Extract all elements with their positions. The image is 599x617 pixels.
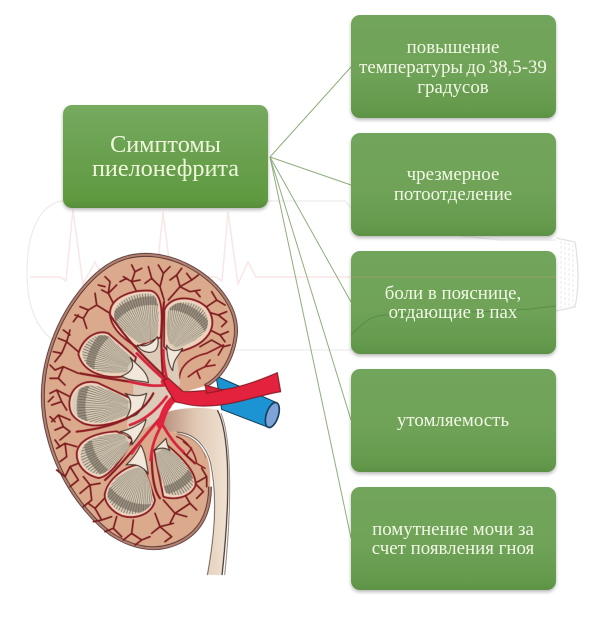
symptom box 2	[351, 133, 556, 236]
background: faint bottle outline	[27, 201, 578, 350]
symptom box 5: счет появления гноя	[372, 538, 535, 559]
symptom box 4	[351, 369, 556, 472]
symptom box 3: боли в пояснице,	[385, 283, 521, 304]
renal artery branches	[77, 302, 195, 498]
symptom box 2: чрезмерное	[407, 164, 499, 185]
small upper hilum lobule vessel	[179, 345, 223, 378]
symptom box 5: помутнение мочи за	[372, 519, 534, 540]
cortex arterial branches	[48, 265, 230, 545]
renal pyramids	[69, 291, 212, 517]
artery fork	[205, 385, 223, 393]
symptom box 1	[351, 15, 556, 118]
symptom box 2: потоотделение	[394, 184, 512, 205]
symptom box 1: температуры до 38,5-39	[359, 57, 547, 78]
symptom box 4: утомляемость	[397, 410, 509, 431]
renal sinus	[127, 333, 180, 437]
symptom box 5	[351, 487, 556, 590]
renal artery trunk	[163, 373, 281, 406]
pyramid base fills	[72, 294, 208, 514]
ureter and pelvis	[163, 408, 230, 575]
kidney body	[43, 255, 236, 548]
kidney illustration	[43, 255, 282, 575]
pyramid stripes	[101, 316, 202, 493]
symptom box 1: градусов	[417, 77, 489, 98]
main box: title	[63, 105, 268, 208]
background: pink ECG trace	[30, 210, 556, 284]
symptom box 1: повышение	[407, 37, 499, 58]
pyramid grey outer bands	[81, 301, 214, 509]
connector lines	[270, 67, 351, 538]
small lower lobule vessel	[177, 437, 205, 468]
title text: Симптомы	[110, 131, 221, 158]
calyces	[120, 337, 183, 474]
symptom box 3	[351, 251, 556, 354]
symptom box 3: отдающие в пах	[389, 302, 518, 323]
title text: пиелонефрита	[92, 155, 239, 182]
renal vein	[216, 376, 282, 429]
